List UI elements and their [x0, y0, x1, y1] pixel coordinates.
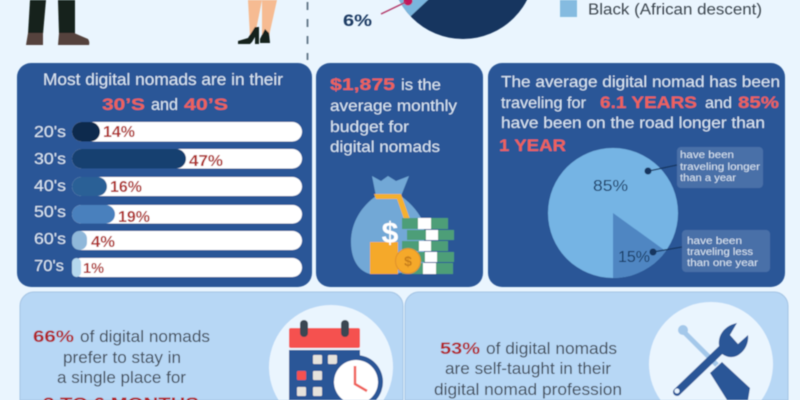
bar row: 30's: 47% — [189, 153, 223, 170]
text: travel statement — [499, 74, 780, 155]
panel: age distribution — [17, 63, 312, 287]
bar row: 60's: 4% — [91, 234, 115, 251]
bar row: 70's: 1% — [83, 260, 104, 277]
bar row: 40's: 40's — [34, 178, 66, 195]
text: travel statement: 1 YEAR — [499, 136, 566, 155]
heading: 30's and 40's: and — [151, 95, 178, 114]
bar row: 20's — [34, 122, 302, 142]
figure: man's legs and shoes — [26, 0, 89, 45]
callout: longer than a year: traveling longer — [680, 162, 761, 173]
bar row: 70's: 70's — [34, 258, 64, 275]
text: self-taught statement: of digital nomads — [486, 340, 617, 358]
bar row: 30's: 30's — [34, 151, 66, 168]
text: stay statement — [33, 328, 210, 400]
bar row: 50's — [34, 204, 302, 226]
text: travel statement: traveling for — [501, 95, 587, 112]
label: 6% callout — [343, 2, 406, 30]
icon: money bag with cash and coins: $ — [404, 253, 412, 269]
text: stay statement: a single place for — [57, 369, 187, 387]
panel: self-taught — [405, 292, 788, 400]
dashed divider — [306, 2, 308, 60]
bar row: 20's: 20's — [34, 124, 66, 141]
panel: time traveling — [488, 63, 785, 287]
panel: stay duration — [20, 292, 403, 400]
pie chart: travel duration: 85% — [593, 178, 628, 195]
bar row: 20's: 14% — [103, 124, 135, 141]
callout: less than one year — [650, 230, 770, 272]
bar row: 30's — [34, 149, 302, 170]
pie chart: travel duration: 15% — [618, 249, 650, 266]
heading: 30's and 40's: 40’S — [184, 95, 228, 114]
text: self-taught statement: are self-taught in their — [445, 360, 612, 378]
text: travel statement: 85% — [738, 93, 779, 112]
bar row: 60's — [34, 231, 302, 251]
callout: longer than a year: than a year — [680, 173, 737, 184]
text: travel statement: have been on the road longer than — [501, 115, 765, 132]
icon: money bag with cash and coins: $ — [382, 217, 399, 250]
pie chart: travel duration — [548, 148, 678, 278]
callout: longer than a year: have been — [680, 150, 734, 161]
text: budget statement: digital nomads — [330, 139, 440, 156]
bar row: 40's: 16% — [110, 179, 142, 196]
bar row: 40's — [34, 177, 302, 196]
text: budget statement: is the — [401, 77, 441, 94]
text: stay statement: prefer to stay in — [63, 349, 181, 367]
figure: woman's legs and heels — [238, 0, 277, 44]
panel: monthly budget — [316, 63, 483, 287]
pie chart: ethnicity — [391, 0, 535, 39]
bar row: 70's — [34, 258, 302, 277]
text: self-taught statement — [434, 340, 622, 399]
text: stay statement: 66% — [33, 328, 74, 346]
callout: less than one year: traveling less — [687, 247, 753, 258]
icon: wrench and screwdriver — [649, 302, 773, 400]
legend: Black (African descent): Black (African descent) — [588, 2, 762, 18]
text: budget statement — [330, 75, 457, 156]
text: travel statement: The average digital nomad has been — [501, 74, 780, 91]
heading: 30's and 40's: 30’S — [102, 95, 145, 114]
icon: calendar and clock — [269, 305, 393, 400]
text: travel statement: 6.1 YEARS — [600, 93, 697, 112]
heading: 30's and 40's — [102, 95, 228, 114]
text: budget statement: $1,875 — [330, 75, 395, 94]
callout: longer than a year — [644, 147, 763, 188]
label: 6% callout: 6% — [343, 11, 372, 30]
callout: less than one year: have been — [687, 236, 742, 247]
text: budget statement: average monthly — [330, 98, 457, 115]
text: self-taught statement: 53% — [440, 340, 480, 358]
text: travel statement: and — [705, 95, 732, 112]
icon: money bag with cash and coins — [351, 176, 454, 274]
heading: age panel: Most digital nomads are in their — [43, 71, 284, 89]
text: self-taught statement: digital nomad profession — [434, 381, 622, 399]
callout: less than one year: than one year — [687, 258, 759, 269]
bar row: 60's: 60's — [34, 231, 66, 248]
bar row: 50's: 19% — [118, 209, 150, 226]
text: stay statement: of digital nomads — [80, 328, 210, 346]
bar row: 50's: 50's — [34, 204, 66, 221]
text: budget statement: budget for — [330, 119, 410, 136]
